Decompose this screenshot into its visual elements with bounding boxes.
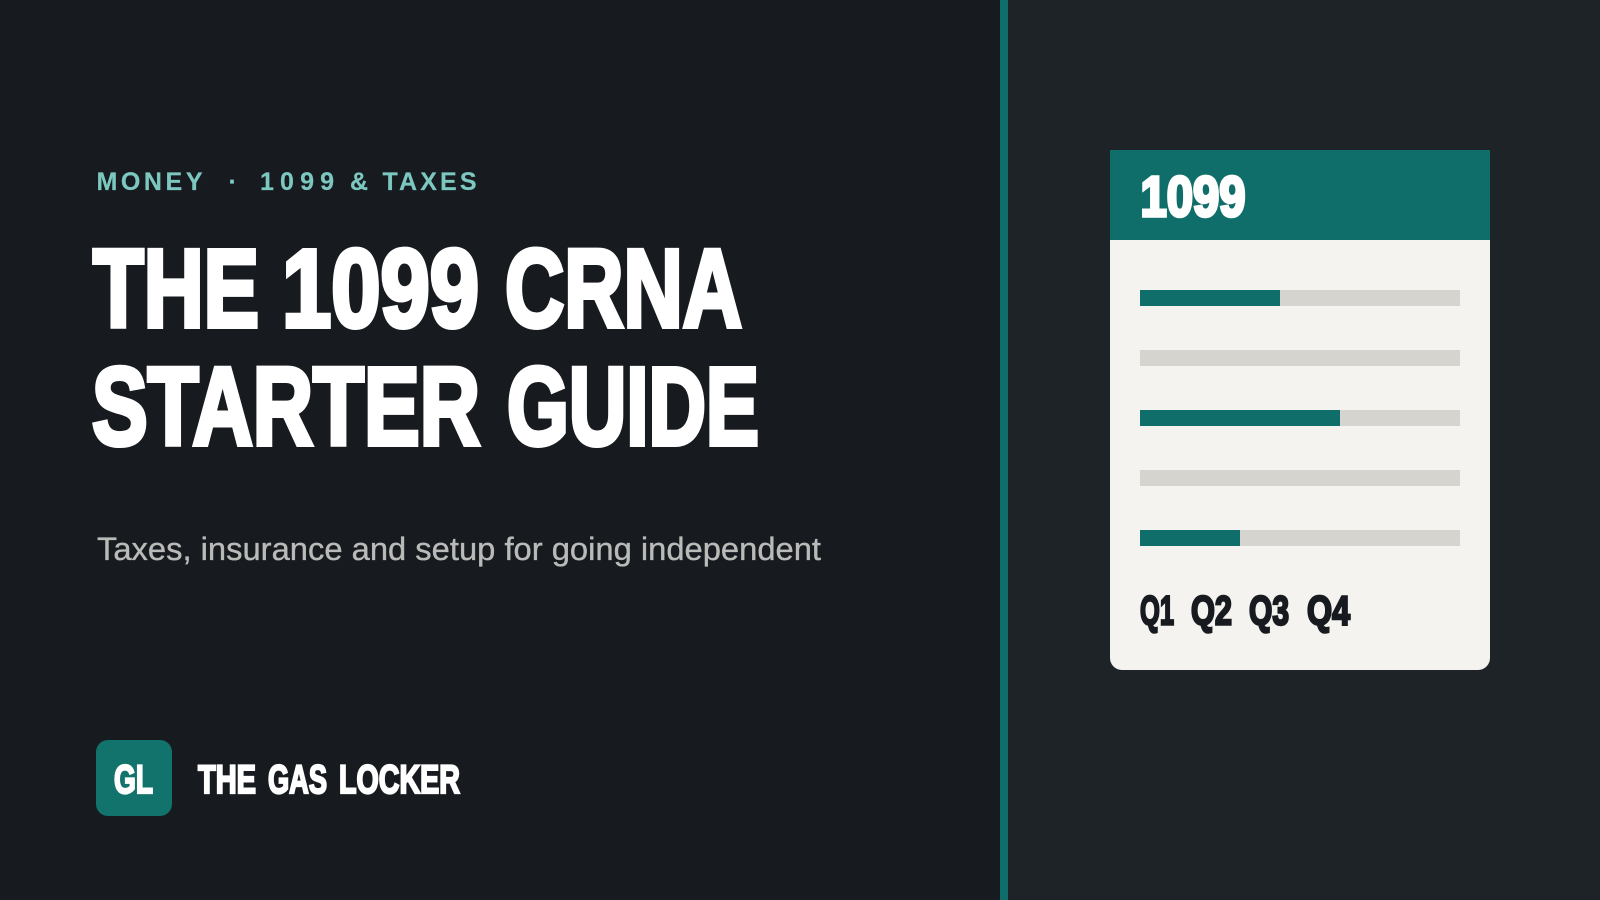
subtitle: Taxes, insurance and setup for going independent <box>97 531 821 567</box>
icon: GL logo badge: GL <box>114 758 153 802</box>
eyebrow: category label: & <box>350 168 368 196</box>
bar row 1 <box>1140 290 1460 306</box>
eyebrow: category label: MONEY <box>96 168 203 196</box>
panel: 1099 form card <box>1110 150 1490 670</box>
eyebrow: category label: 1099 <box>260 168 334 196</box>
brand name: LOCKER <box>339 758 460 802</box>
brand name: GAS <box>268 758 327 802</box>
card header <box>1110 150 1490 240</box>
title: STARTER <box>92 346 480 468</box>
card heading: 1099: 1099 <box>1140 165 1246 229</box>
bar row 4 <box>1140 470 1460 486</box>
card body <box>1110 150 1490 670</box>
brand logo lockup <box>96 740 460 816</box>
bar row 5 <box>1140 530 1460 546</box>
brand name: THE <box>198 758 256 802</box>
eyebrow: category label <box>96 168 476 196</box>
bar row 3 <box>1140 410 1460 426</box>
brand name <box>198 758 460 802</box>
bar row 2 <box>1140 350 1460 366</box>
quarter labels: Q4 <box>1307 588 1350 634</box>
panel: right background <box>1008 0 1600 900</box>
title <box>92 228 759 468</box>
quarter labels: Q1 <box>1140 588 1174 634</box>
eyebrow: category label: · <box>228 168 237 196</box>
eyebrow: category label: TAXES <box>382 168 476 196</box>
quarter labels: Q3 <box>1249 588 1289 634</box>
title: CRNA <box>505 228 742 350</box>
teal vertical divider <box>1000 0 1008 900</box>
icon: GL logo badge <box>96 740 172 816</box>
title: THE <box>93 228 259 350</box>
title: 1099 <box>282 228 479 350</box>
panel: left background <box>0 0 1000 900</box>
title: GUIDE <box>507 346 759 468</box>
quarter labels: Q2 <box>1191 588 1232 634</box>
quarter labels <box>1140 588 1350 634</box>
